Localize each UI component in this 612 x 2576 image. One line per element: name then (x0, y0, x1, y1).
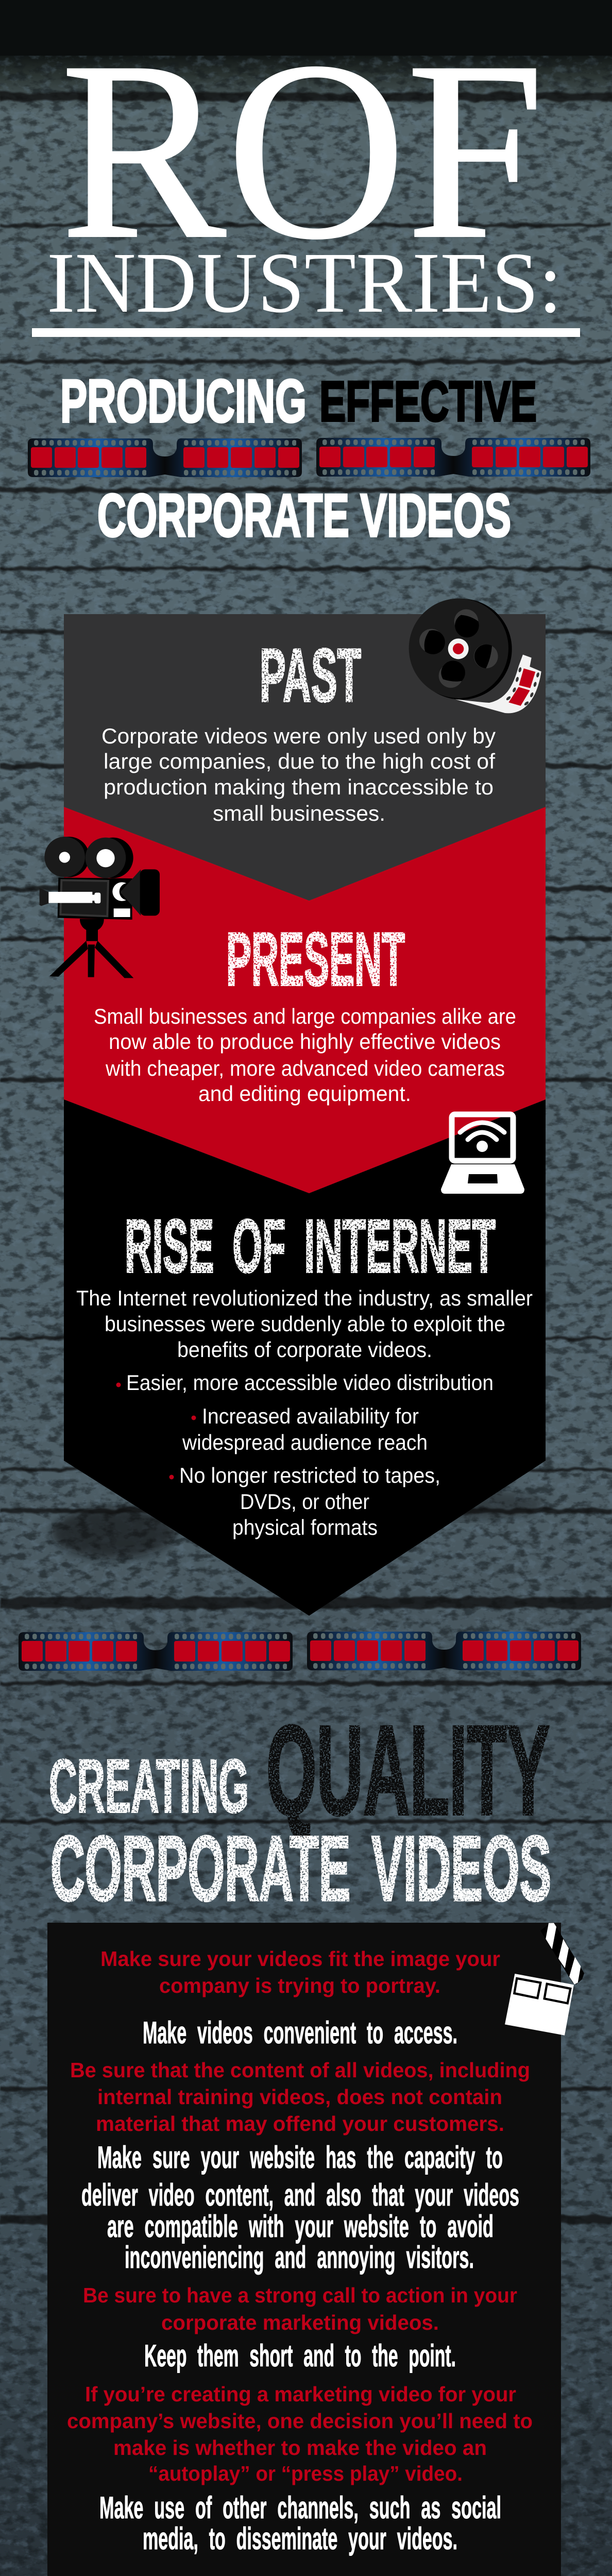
film strip right (316, 438, 590, 477)
panel: rise of internet chevron (64, 1099, 546, 1616)
list: internet benefits: physical formats (232, 1515, 378, 1539)
tip 8 (99, 2490, 501, 2556)
icon: film reel (409, 599, 541, 713)
tip 3 (70, 2058, 530, 2136)
text: present description: with cheaper, more advanced video cameras (105, 1056, 505, 1080)
panel: past chevron (64, 614, 546, 901)
text: rise of internet description: The Internet revolutionized the industry, as smaller (76, 1286, 533, 1310)
text: present description: Small businesses and large companies alike are (94, 1004, 516, 1028)
heading: Creating Quality: CREATING (49, 1744, 249, 1828)
tip 7: company’s website, one decision you’ll need to (67, 2409, 533, 2433)
tip 1: Make sure your videos fit the image your (100, 1947, 500, 1971)
tip 3: material that may offend your customers. (96, 2112, 504, 2136)
text: rise of internet description: businesses were suddenly able to exploit the (105, 1312, 505, 1336)
tip 7 (67, 2382, 533, 2485)
panel: present chevron (64, 807, 546, 1193)
text: present description: now able to produce highly effective videos (109, 1029, 501, 1054)
list: internet benefits: DVDs, or other (240, 1489, 369, 1514)
heading: Past: PAST (260, 633, 361, 717)
text: past description: production making them inaccessible to (104, 775, 494, 799)
title: ROF Industries: INDUSTRIES: (47, 235, 562, 331)
heading: Present: PRESENT (226, 917, 405, 1001)
title: ROF Industries: ROF (60, 8, 545, 292)
tip 7: “autoplay” or “press play” video. (148, 2462, 463, 2485)
text: past description: small businesses. (213, 801, 385, 825)
list: internet benefits (116, 1370, 494, 1539)
panel: quality tips (47, 1923, 561, 2576)
tip 5: Be sure to have a strong call to action in your (83, 2283, 517, 2307)
text: present description: and editing equipment. (198, 1081, 411, 1106)
list: internet benefits: Increased availability for (202, 1404, 419, 1428)
list: internet benefits: widespread audience reach (182, 1430, 428, 1454)
text: present description (94, 1004, 516, 1106)
tip 7: make is whether to make the video an (113, 2436, 487, 2460)
heading: Creating Quality (49, 1700, 550, 1841)
film strip divider left (19, 1632, 293, 1671)
tip 5: corporate marketing videos. (161, 2311, 439, 2334)
film strip left (28, 438, 302, 477)
tip 3: Be sure that the content of all videos, including (70, 2058, 530, 2082)
text: past description: large companies, due to the high cost of (104, 749, 495, 773)
film strip divider right (307, 1632, 581, 1670)
text: rise of internet description (76, 1286, 533, 1362)
tip 1 (100, 1947, 500, 1997)
icon: laptop with wifi (441, 1114, 524, 1194)
list: internet benefits: Easier, more accessible video distribution (126, 1370, 494, 1395)
icon: clapperboard (505, 1923, 584, 2036)
tip 5 (83, 2283, 517, 2334)
tip 4 (81, 2140, 519, 2275)
subtitle: Producing Effective: PRODUCING (60, 367, 307, 435)
tip 1: company is trying to portray. (159, 1974, 440, 1997)
list: internet benefits: No longer restricted to tapes, (179, 1463, 440, 1487)
text: rise of internet description: benefits of corporate videos. (177, 1337, 432, 1362)
tip 7: If you’re creating a marketing video for your (85, 2382, 516, 2406)
text: past description (101, 724, 496, 825)
text: past description: Corporate videos were only used only by (101, 724, 496, 748)
icon: movie camera (40, 837, 160, 978)
tip 3: internal training videos, does not contain (97, 2085, 502, 2109)
title underline (32, 328, 580, 337)
